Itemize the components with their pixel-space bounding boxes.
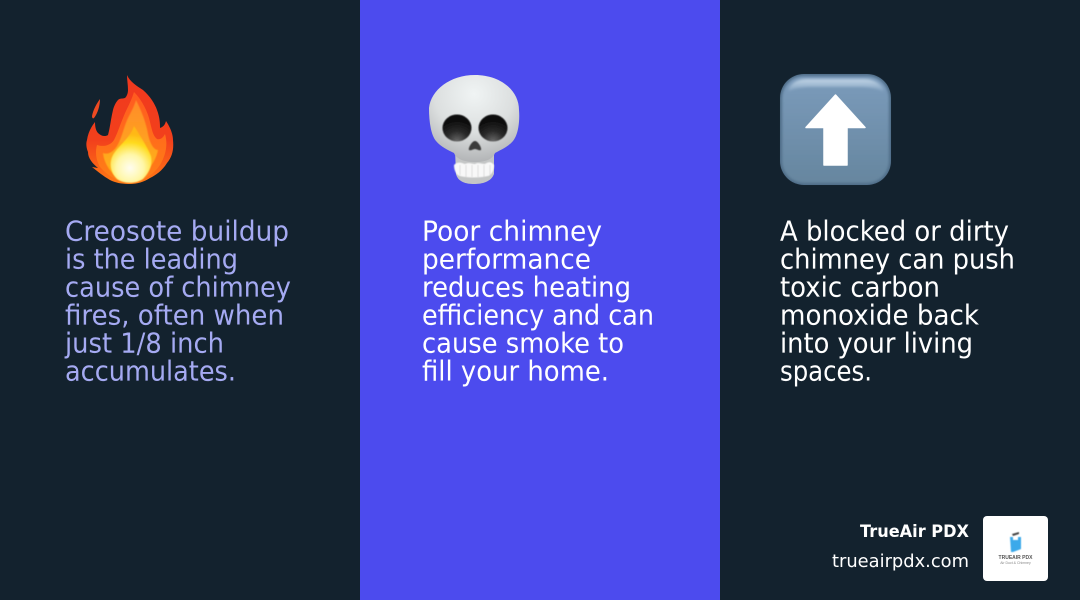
brand name: TrueAir PDX <box>860 522 969 542</box>
icon: skull <box>429 75 519 184</box>
icon: fire <box>86 75 173 184</box>
text: creosote: fires, often when <box>65 300 284 332</box>
text: creosote: is the leading <box>65 244 238 276</box>
panel: left background <box>0 0 360 600</box>
icon: up arrow <box>780 74 891 185</box>
panel: right background <box>720 0 1080 600</box>
text: creosote <box>64 216 291 388</box>
text: chimney performance: cause smoke to <box>422 328 624 360</box>
text: creosote: just 1/8 inch <box>64 328 224 360</box>
text: chimney performance: fill your home. <box>422 356 609 388</box>
text: creosote: Creosote buildup <box>65 216 289 248</box>
text: chimney performance: Poor chimney <box>422 216 602 248</box>
text: carbon monoxide: into your living <box>780 328 973 360</box>
logo <box>983 516 1048 581</box>
panel: middle background <box>360 0 720 600</box>
text: carbon monoxide: chimney can push <box>780 244 1015 276</box>
logo: Air Duct & Chimney <box>1000 561 1031 565</box>
text: chimney performance: reduces heating <box>422 272 631 304</box>
text: carbon monoxide: toxic carbon <box>780 272 940 304</box>
text: carbon monoxide <box>780 216 1015 388</box>
logo: TRUEAIR PDX <box>999 555 1033 561</box>
text: carbon monoxide: spaces. <box>780 356 872 388</box>
website: trueairpdx.com <box>832 551 969 572</box>
text: chimney performance <box>422 216 654 388</box>
text: creosote: accumulates. <box>65 356 236 388</box>
text: carbon monoxide: monoxide back <box>780 300 979 332</box>
text: chimney performance: efficiency and can <box>422 300 654 332</box>
text: creosote: cause of chimney <box>65 272 291 304</box>
text: chimney performance: performance <box>422 244 591 276</box>
text: carbon monoxide: A blocked or dirty <box>780 216 1009 248</box>
